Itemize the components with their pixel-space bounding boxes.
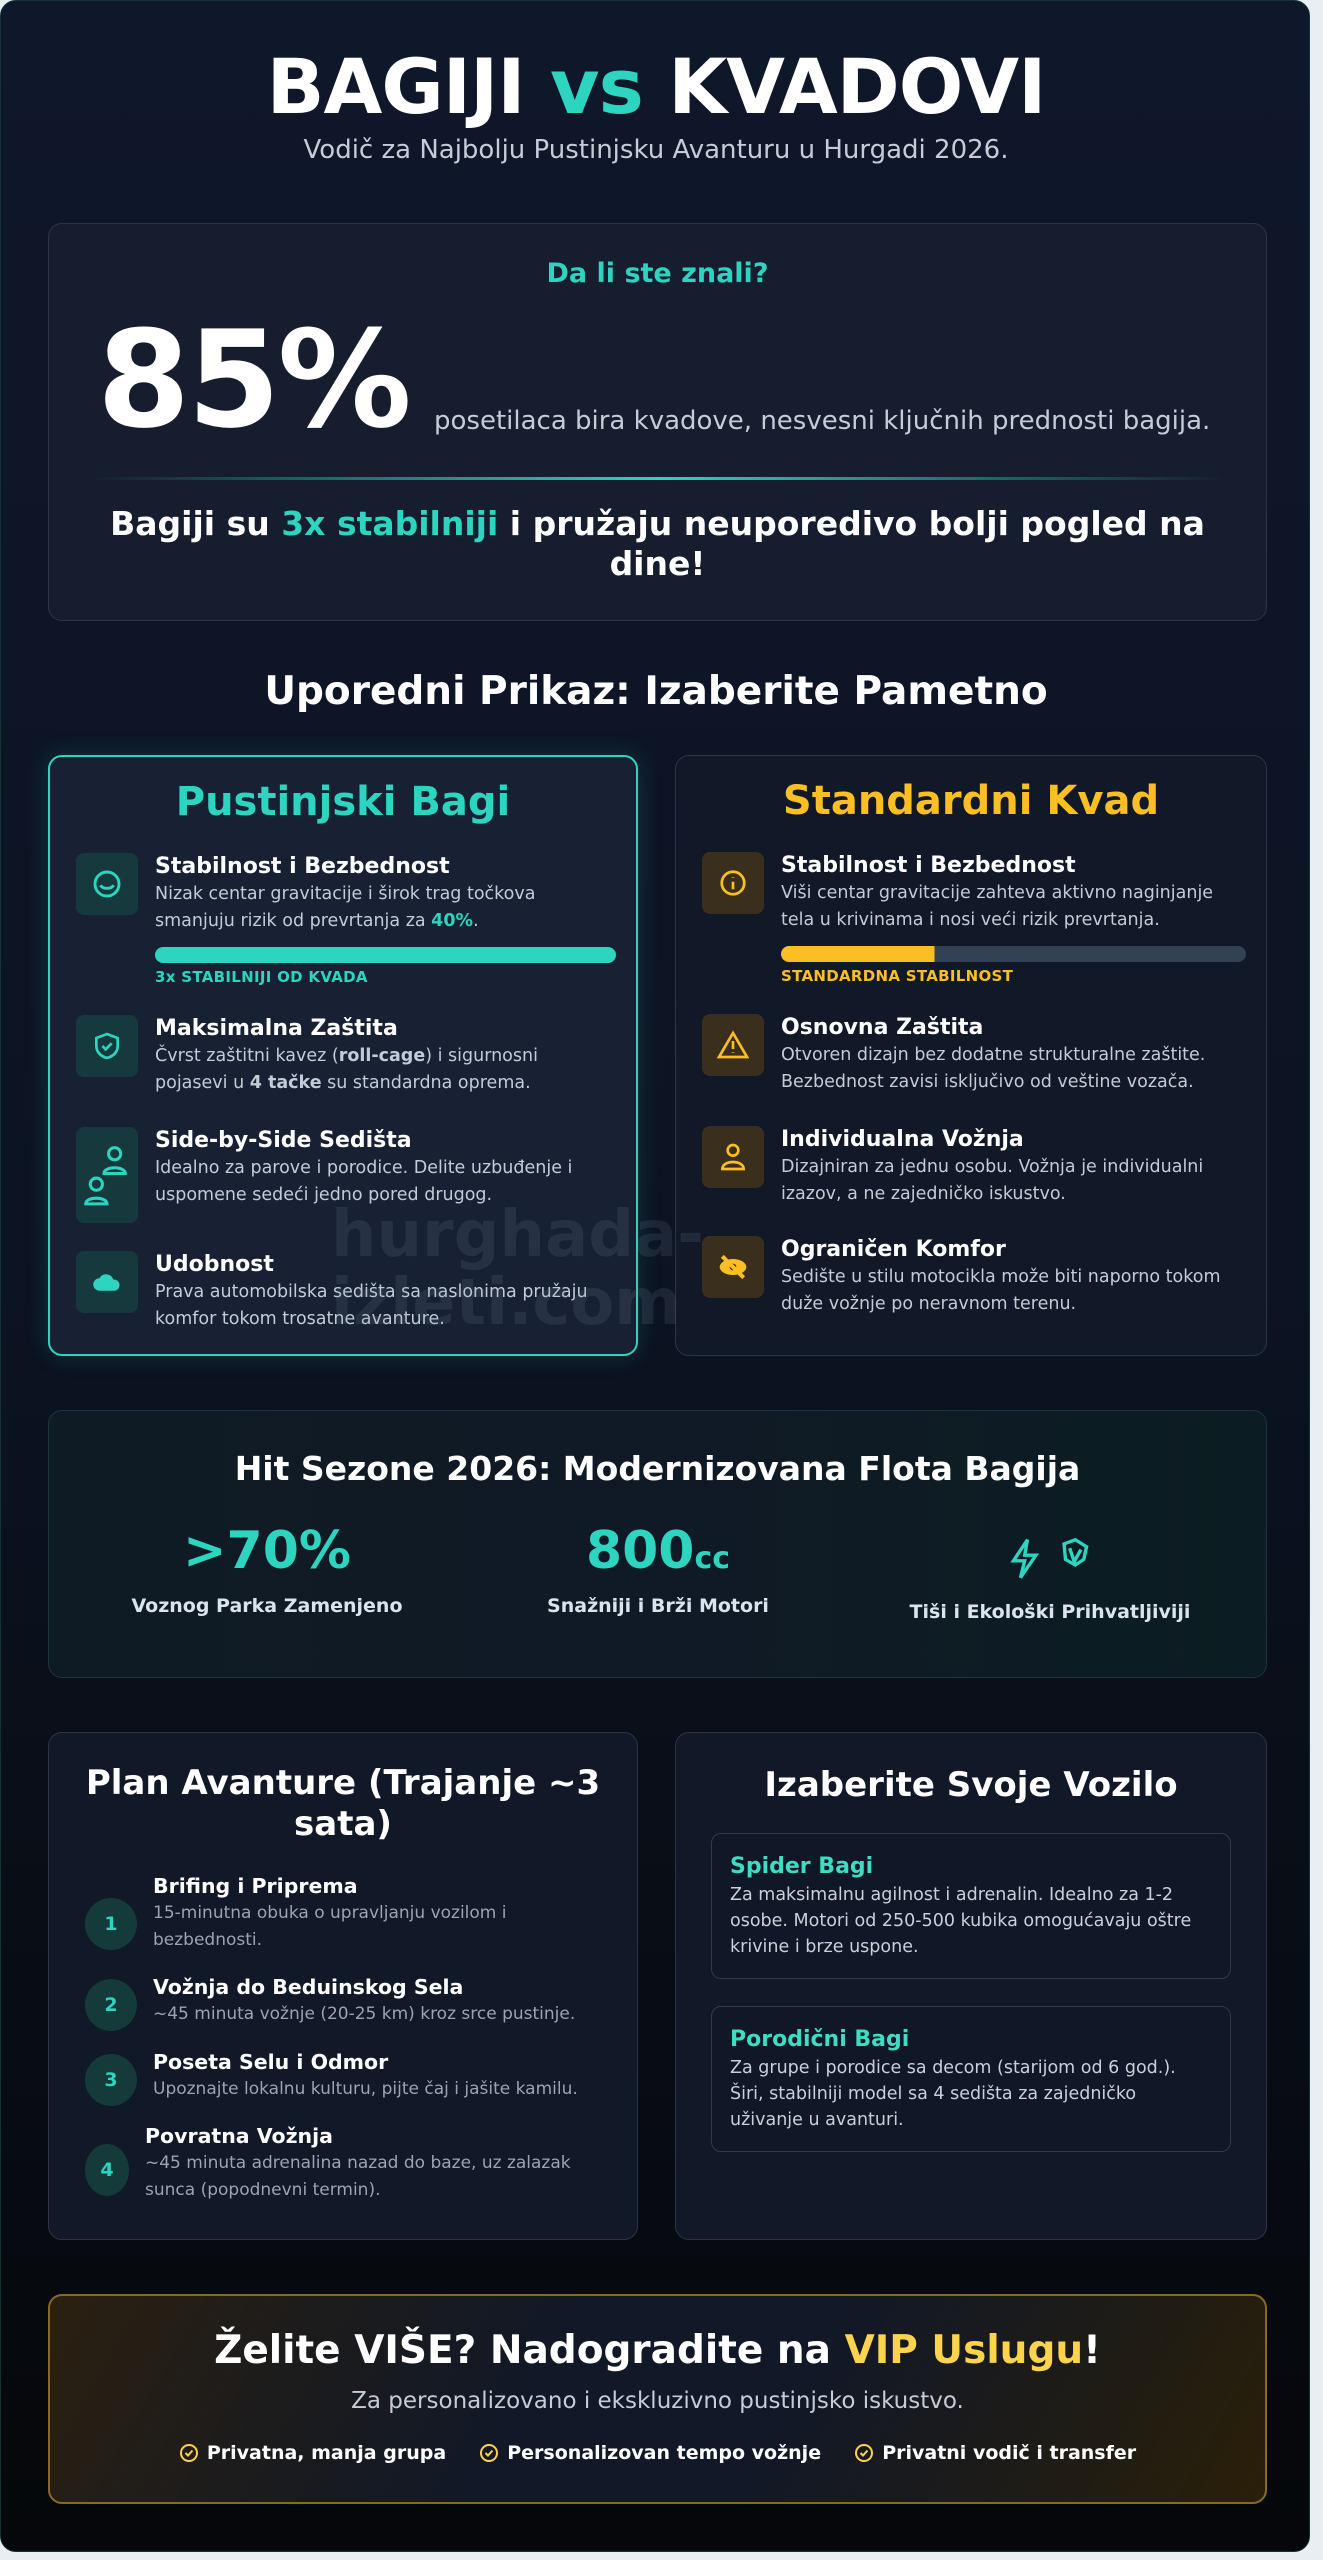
item: side by side — [76, 1127, 572, 1223]
checklist: Privatni vodič i transfer — [882, 2442, 1136, 2464]
stat: 70%: Voznog Parka Zamenjeno — [131, 1595, 403, 1617]
item: protection: Čvrst zaštitni kavez (roll-cage) i sigurnosni pojasevi u 4 tačke su standardna oprema. — [155, 1046, 538, 1093]
step 3: Poseta Selu i Odmor — [153, 2050, 388, 2074]
panel: VIP — [48, 2294, 1267, 2504]
item: limited comfort: Sedište u stilu motocikla može biti naporno tokom duže vožnje po neravnom terenu. — [781, 1267, 1220, 1314]
stat: 800cc: Snažniji i Brži Motori — [547, 1595, 769, 1617]
card title: Pustinjski Bagi — [176, 779, 510, 825]
item: individual — [702, 1126, 1203, 1204]
panel: did you know — [48, 223, 1267, 621]
stat: 70% — [131, 1521, 403, 1617]
callout statement: Bagiji su 3x stabilniji i pružaju neuporedivo bolji pogled na dine! — [110, 504, 1205, 583]
subtitle: Vodič za Najbolju Pustinjsku Avanturu u Hurgadi 2026. — [304, 135, 1008, 165]
panel: buggy — [48, 755, 638, 1356]
step 4: ~45 minuta adrenalina nazad do baze, uz zalazak sunca (popodnevni termin). — [145, 2153, 571, 2200]
watermark: hurghada- — [331, 1198, 704, 1272]
item: protection — [76, 1015, 538, 1093]
icon: eye slash — [702, 1236, 764, 1298]
heading: Želite VIŠE? Nadogradite na VIP Uslugu! — [214, 2328, 1101, 2373]
panel: choose vehicle — [675, 1732, 1267, 2240]
item: stability: Viši centar gravitacije zahteva aktivno naginjanje tela u krivinama i nosi veći rizik prevrtanja. — [781, 883, 1213, 930]
card title: Standardni Kvad — [783, 778, 1159, 824]
box: spider — [711, 1833, 1231, 1979]
step 4 — [85, 2124, 571, 2200]
item: limited comfort: Ograničen Komfor — [781, 1237, 1006, 1262]
stat: 800cc: 800cc — [586, 1521, 730, 1581]
item: individual: Dizajniran za jednu osobu. Vožnja je individualni izazov, a ne zajedničko iskustvo. — [781, 1157, 1203, 1204]
item: comfort — [76, 1251, 588, 1329]
heading: Izaberite Svoje Vozilo — [764, 1765, 1178, 1805]
step 1: 15-minutna obuka o upravljanju vozilom i bezbednosti. — [153, 1903, 506, 1950]
icon: cloud — [76, 1251, 138, 1313]
item: stability: Stabilnost i Bezbednost — [155, 854, 450, 879]
icon: info — [702, 852, 764, 914]
step 4: 4 — [100, 2159, 114, 2181]
panel: plan — [48, 1732, 638, 2240]
step 1: 1 — [104, 1913, 118, 1935]
stat description: posetilaca bira kvadove, nesvesni ključnih prednosti bagija. — [434, 406, 1210, 436]
checklist: Personalizovan tempo vožnje — [507, 2442, 821, 2464]
box: family — [711, 2006, 1231, 2152]
section heading: comparison: Uporedni Prikaz: Izaberite Pametno — [264, 669, 1048, 714]
icon: person — [702, 1126, 764, 1188]
box: family: Za grupe i porodice sa decom (starijom od 6 god.). Širi, stabilniji model sa 4 sedišta za zajedničko uživanje u avanturi. — [730, 2058, 1176, 2130]
item: stability — [702, 852, 1246, 985]
panel: quad — [675, 755, 1267, 1356]
heading: Hit Sezone 2026: Modernizovana Flota Bagija — [235, 1449, 1080, 1488]
step 3: 3 — [104, 2069, 118, 2091]
item: side by side: Side-by-Side Sedišta — [155, 1128, 412, 1153]
item: basic protection — [702, 1014, 1205, 1092]
item: comfort: Udobnost — [155, 1252, 274, 1277]
step 1: Brifing i Priprema — [153, 1874, 358, 1898]
item: protection: Maksimalna Zaštita — [155, 1016, 398, 1041]
subtitle: Za personalizovano i ekskluzivno pustinjsko iskustvo. — [351, 2388, 964, 2414]
stat: eco: Tiši i Ekološki Prihvatljiviji — [910, 1601, 1190, 1623]
box: spider: Za maksimalnu agilnost i adrenalin. Idealno za 1-2 osobe. Motori od 250-500 kubika omogućavaju oštre krivine i brze uspone. — [730, 1885, 1191, 1957]
checklist: Privatna, manja grupa — [207, 2442, 446, 2464]
panel: season highlight — [48, 1410, 1267, 1678]
item: stability: 3x STABILNIJI OD KVADA — [155, 968, 368, 986]
box: family: Porodični Bagi — [730, 2027, 909, 2052]
item: stability — [76, 853, 616, 986]
item: side by side: Idealno za parove i porodice. Delite uzbuđenje i uspomene sedeći jedno pored drugog. — [155, 1158, 572, 1205]
icon: warning — [702, 1014, 764, 1076]
icon: smile — [76, 853, 138, 915]
item: individual: Individualna Vožnja — [781, 1127, 1024, 1152]
step 2: ~45 minuta vožnje (20-25 km) kroz srce pustinje. — [153, 2004, 575, 2024]
box: spider: Spider Bagi — [730, 1854, 873, 1879]
item: basic protection: Osnovna Zaštita — [781, 1015, 983, 1040]
step 3 — [85, 2050, 578, 2106]
title: BAGIJI vs KVADOVI — [267, 42, 1045, 131]
step 2: 2 — [104, 1994, 118, 2016]
item: stability: Nizak centar gravitacije i širok trag točkova smanjuju rizik od prevrtanja za 40%. — [155, 884, 535, 931]
step 4: Povratna Vožnja — [145, 2124, 333, 2148]
big stat 85%: 85% — [97, 302, 409, 458]
stat: eco — [910, 1538, 1190, 1623]
stat: 70%: >70% — [183, 1521, 351, 1581]
step 3: Upoznajte lokalnu kulturu, pijte čaj i jašite kamilu. — [153, 2079, 578, 2099]
heading: Plan Avanture (Trajanje ~3 sata) — [86, 1763, 600, 1844]
stat: 800cc — [547, 1521, 769, 1617]
watermark: izleti.com — [331, 1266, 681, 1340]
step 2 — [85, 1975, 575, 2031]
step 1 — [85, 1874, 506, 1950]
item: stability: STANDARDNA STABILNOST — [781, 967, 1013, 985]
icon: two people — [76, 1127, 138, 1223]
watermark — [331, 1198, 704, 1340]
icon: shield — [76, 1015, 138, 1077]
checklist — [180, 2442, 1136, 2464]
item: comfort: Prava automobilska sedišta sa naslonima pružaju komfor tokom trosatne avanture. — [155, 1282, 588, 1329]
item: basic protection: Otvoren dizajn bez dodatne strukturalne zaštite. Bezbednost zavisi isključivo od veštine vozača. — [781, 1045, 1205, 1092]
heading: da li ste znali: Da li ste znali? — [547, 258, 768, 289]
item: limited comfort — [702, 1236, 1220, 1314]
item: stability: Stabilnost i Bezbednost — [781, 853, 1076, 878]
step 2: Vožnja do Beduinskog Sela — [153, 1975, 463, 1999]
